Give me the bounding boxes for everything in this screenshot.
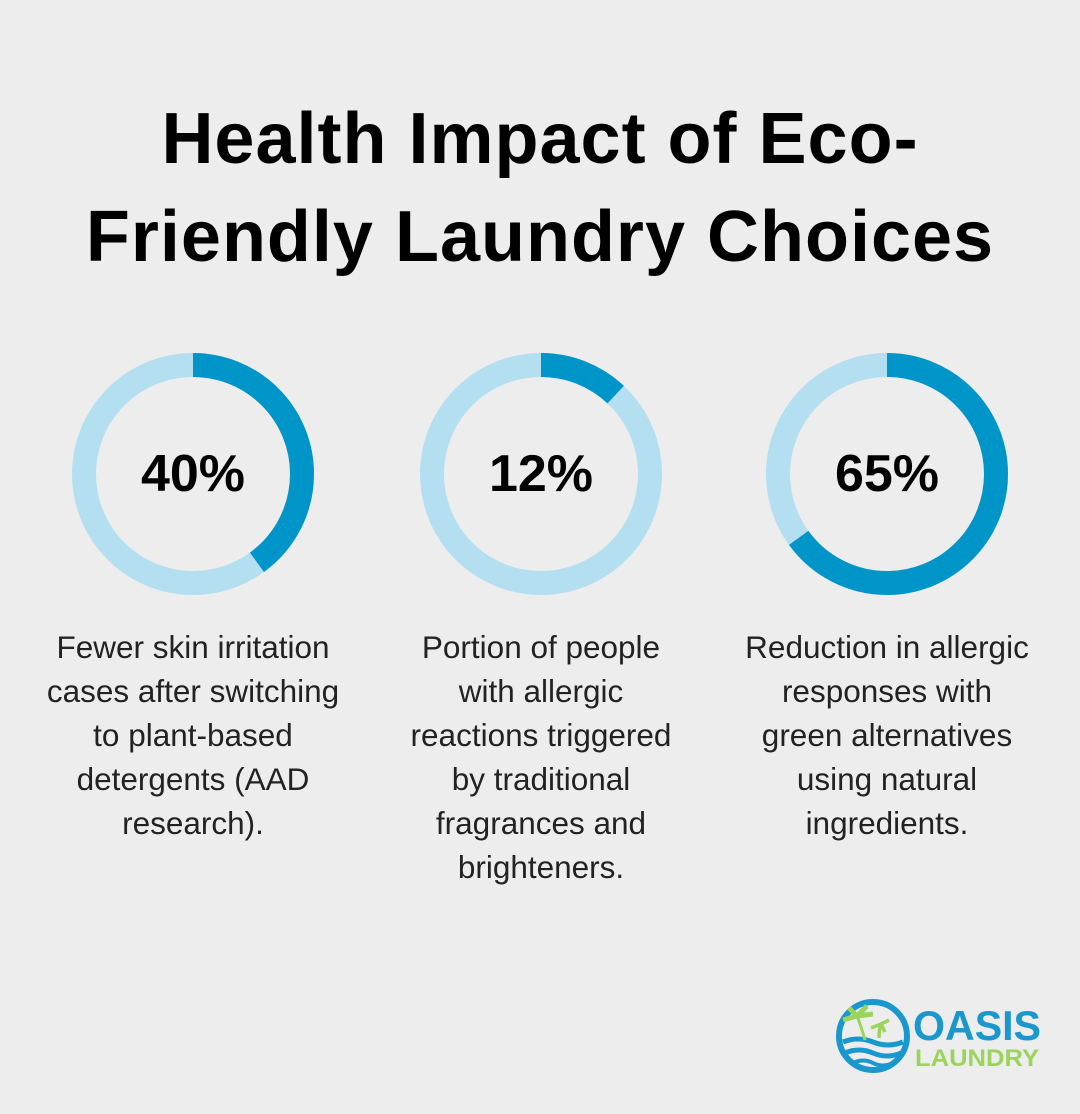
- stat: 12% donut: 12%: [489, 445, 593, 503]
- description 2: reactions triggered: [411, 717, 671, 753]
- description 3: [745, 629, 1029, 841]
- description 2: with allergic: [459, 673, 623, 709]
- description 1: Fewer skin irritation: [56, 629, 330, 665]
- description 3: ingredients.: [806, 805, 968, 841]
- stat: 65% donut: [766, 353, 1008, 595]
- stat: 40% donut: 40%: [141, 445, 245, 503]
- description 1: research).: [122, 805, 264, 841]
- logo: LAUNDRY: [915, 1045, 1039, 1072]
- description 2: by traditional: [452, 761, 630, 797]
- description 3: responses with: [782, 673, 992, 709]
- title: Friendly Laundry Choices: [86, 197, 994, 277]
- title: Health Impact of Eco-: [161, 99, 919, 179]
- stat: 65% donut: 65%: [835, 445, 939, 503]
- description 2: [411, 629, 671, 885]
- description 3: using natural: [797, 761, 977, 797]
- description 3: Reduction in allergic: [745, 629, 1029, 665]
- title: [86, 99, 994, 277]
- description 2: Portion of people: [422, 629, 660, 665]
- description 1: to plant-based: [93, 717, 293, 753]
- description 1: [47, 629, 339, 841]
- description 2: brighteners.: [458, 849, 624, 885]
- description 1: detergents (AAD: [77, 761, 309, 797]
- logo: [836, 999, 1041, 1073]
- stat: 12% donut: [420, 353, 662, 595]
- description 2: fragrances and: [436, 805, 646, 841]
- description 3: green alternatives: [762, 717, 1012, 753]
- description 1: cases after switching: [47, 673, 339, 709]
- logo: OASIS: [913, 1002, 1041, 1049]
- stat: 40% donut: [72, 353, 314, 595]
